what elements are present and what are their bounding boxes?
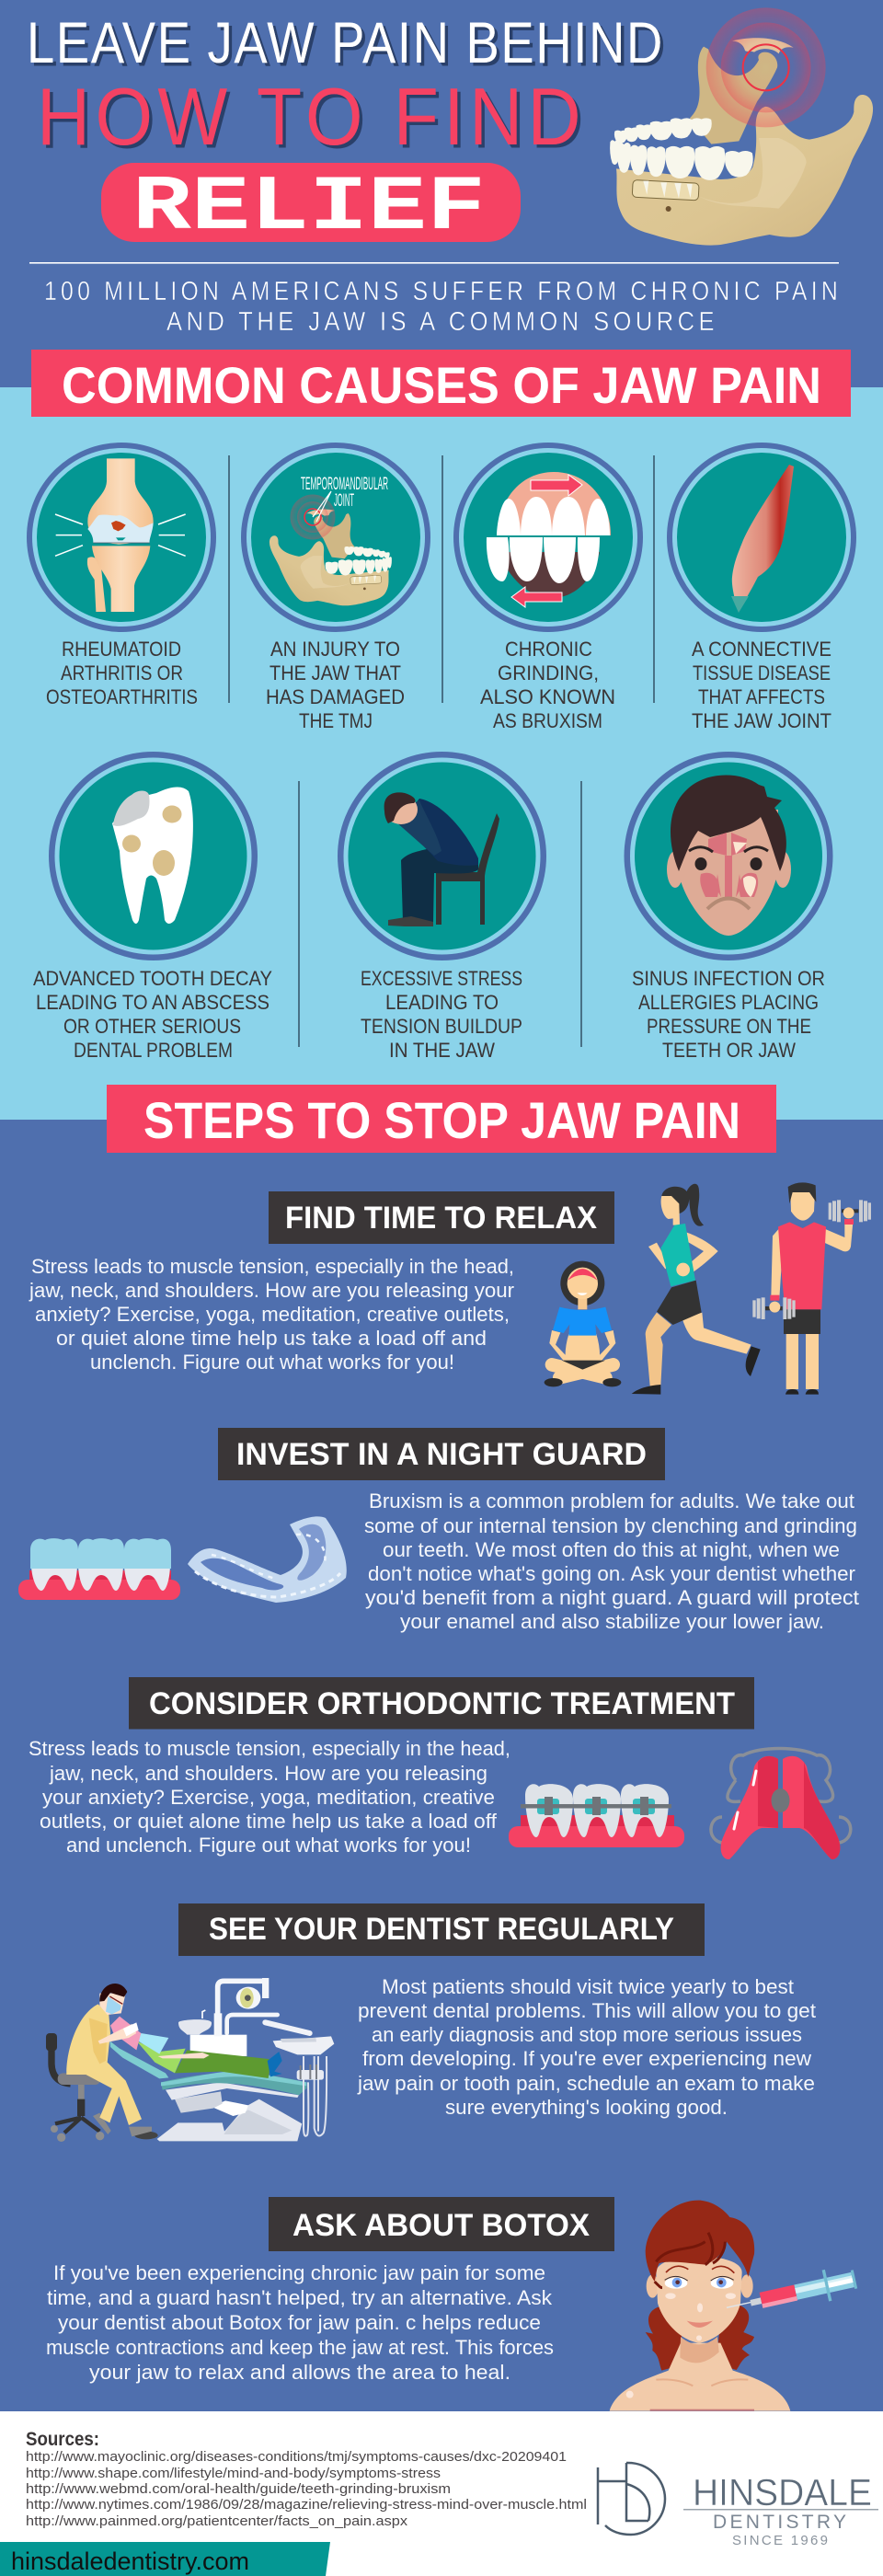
cause: jaw injury bbox=[241, 443, 430, 732]
caption: tooth decay: LEADING TO AN ABSCESS bbox=[36, 991, 269, 1014]
sources: http://www.webmd.com/oral-health/guide/teeth-grinding-bruxism bbox=[26, 2481, 451, 2497]
text block: orthodontic bbox=[29, 1737, 510, 1857]
text block: dentist: jaw pain or tooth pain, schedule an exam to make bbox=[357, 2072, 815, 2095]
text block: dentist: from developing. If you're ever experiencing new bbox=[362, 2047, 811, 2070]
illustration: braces bbox=[509, 1784, 684, 1847]
panel: orthodontic treatment bbox=[29, 1677, 851, 1859]
illustration: dentist and patient bbox=[46, 1978, 334, 2142]
caption: tooth decay bbox=[33, 967, 272, 1062]
text block: orthodontic: jaw, neck, and shoulders. How are you releasing bbox=[49, 1762, 487, 1785]
cause: tooth decay bbox=[33, 752, 272, 1062]
relief pill bbox=[101, 163, 521, 252]
icon: decayed tooth bbox=[49, 752, 258, 960]
caption: connective tissue: THE JAW JOINT bbox=[692, 709, 831, 732]
caption: grinding: GRINDING, bbox=[498, 661, 599, 684]
heading: botox: ASK ABOUT BOTOX bbox=[292, 2208, 590, 2243]
caption: sinus: ALLERGIES PLACING bbox=[638, 991, 819, 1014]
caption: stress bbox=[361, 967, 522, 1062]
sources: http://www.nytimes.com/1986/09/28/magazine/relieving-stress-mind-over-muscle.html bbox=[26, 2497, 587, 2513]
text block: night guard: our teeth. We most often do this at night, when we bbox=[383, 1538, 840, 1561]
text block: orthodontic: Stress leads to muscle tension, especially in the head, bbox=[29, 1737, 510, 1760]
heading: orthodontic: CONSIDER ORTHODONTIC TREATMENT bbox=[149, 1686, 735, 1721]
caption: stress: LEADING TO bbox=[385, 991, 499, 1014]
caption: connective tissue: A CONNECTIVE bbox=[692, 638, 831, 661]
sources: Sources: bbox=[26, 2429, 99, 2450]
caption: arthritis: OSTEOARTHRITIS bbox=[46, 685, 198, 708]
title line: how to find: HOW TO FIND bbox=[37, 71, 586, 162]
text block: dentist: sure everything's looking good. bbox=[445, 2096, 728, 2119]
caption: sinus bbox=[632, 967, 825, 1062]
logo wordmark: DENTISTRY bbox=[713, 2512, 846, 2533]
illustration: yoga, running, weights bbox=[545, 1182, 871, 1395]
text block: relax: unclench. Figure out what works for you! bbox=[90, 1351, 454, 1374]
footer url tab: hinsdaledentistry.com bbox=[11, 2547, 249, 2575]
text block: relax: Stress leads to muscle tension, especially in the head, bbox=[31, 1255, 514, 1278]
text block: botox: time, and a guard hasn't helped, try an alternative. Ask bbox=[47, 2286, 553, 2309]
lamp and tray bbox=[178, 1978, 334, 2136]
icon: tmj jaw bbox=[241, 443, 430, 632]
caption: jaw injury: THE JAW THAT bbox=[269, 661, 401, 684]
logo: hinsdale dentistry bbox=[598, 2463, 878, 2548]
caption: connective tissue: THAT AFFECTS bbox=[698, 685, 825, 708]
sources: http://www.mayoclinic.org/diseases-conditions/tmj/symptoms-causes/dxc-20209401 bbox=[26, 2449, 567, 2465]
heading: night guard bbox=[218, 1428, 665, 1480]
caption: grinding: CHRONIC bbox=[505, 638, 592, 661]
heading: orthodontic bbox=[129, 1677, 754, 1730]
panel: ask about botox bbox=[46, 2197, 859, 2411]
caption: arthritis: ARTHRITIS OR bbox=[61, 661, 183, 684]
icon: muscle bbox=[667, 443, 856, 632]
text block: relax: anxiety? Exercise, yoga, meditation, creative outlets, bbox=[35, 1303, 510, 1326]
dentist bbox=[46, 1984, 158, 2142]
logo mark: HD bbox=[598, 2463, 665, 2535]
logo wordmark: HINSDALE bbox=[693, 2471, 872, 2513]
text block: botox: muscle contractions and keep the jaw at rest. This forces bbox=[46, 2336, 554, 2359]
heading: botox bbox=[269, 2197, 614, 2251]
sources bbox=[26, 2429, 587, 2529]
caption: tooth decay: OR OTHER SERIOUS bbox=[63, 1015, 241, 1038]
text block: dentist bbox=[357, 1975, 816, 2119]
text block: night guard: don't notice what's going on. Ask your dentist whether bbox=[368, 1562, 855, 1585]
patient bbox=[110, 2017, 282, 2078]
caption: stress: IN THE JAW bbox=[389, 1039, 495, 1062]
icon: knee joint bbox=[27, 443, 216, 632]
figure: sitting woman bbox=[545, 1261, 621, 1386]
heading: see your dentist: SEE YOUR DENTIST REGULARLY bbox=[209, 1912, 674, 1947]
caption: jaw injury: THE TMJ bbox=[299, 709, 373, 732]
cause: grinding bbox=[453, 443, 643, 732]
title line: leave jaw pain behind: LEAVE JAW PAIN BEHIND bbox=[27, 11, 664, 75]
heading: find time to relax bbox=[269, 1191, 614, 1244]
text block: relax bbox=[29, 1255, 514, 1374]
caption: grinding: AS BRUXISM bbox=[493, 709, 602, 732]
cause: sinus bbox=[624, 752, 833, 1062]
logo wordmark: SINCE 1969 bbox=[732, 2533, 828, 2548]
text block: night guard: you'd benefit from a night guard. A guard will protect bbox=[365, 1586, 859, 1609]
caption: grinding bbox=[480, 638, 615, 732]
text block: night guard: Bruxism is a common problem for adults. We take out bbox=[369, 1489, 854, 1512]
icon: stressed man on chair bbox=[338, 752, 546, 960]
text block: orthodontic: your anxiety? Exercise, yoga, meditation, creative bbox=[42, 1786, 495, 1809]
figure: man with dumbbells bbox=[752, 1182, 871, 1395]
heading: find time to relax: FIND TIME TO RELAX bbox=[285, 1201, 597, 1236]
caption: stress: TENSION BUILDUP bbox=[361, 1015, 522, 1038]
text block: botox: your jaw to relax and allows the area to heal. bbox=[89, 2361, 510, 2384]
heading: common causes: COMMON CAUSES OF JAW PAIN bbox=[62, 356, 821, 414]
caption: sinus: TEETH OR JAW bbox=[662, 1039, 796, 1062]
caption: jaw injury bbox=[266, 638, 405, 732]
caption: tooth decay: ADVANCED TOOTH DECAY bbox=[33, 967, 272, 990]
illustration: clear night guard bbox=[188, 1516, 347, 1603]
subtitle text bbox=[29, 262, 842, 337]
caption: stress: EXCESSIVE STRESS bbox=[361, 967, 522, 990]
caption: tooth decay: DENTAL PROBLEM bbox=[74, 1039, 233, 1062]
icon: tmj jaw: JOINT bbox=[334, 491, 354, 511]
caption: connective tissue: TISSUE DISEASE bbox=[693, 661, 831, 684]
caption: arthritis: RHEUMATOID bbox=[62, 638, 181, 661]
text block: orthodontic: outlets, or quiet alone time help us take a load off bbox=[40, 1810, 498, 1833]
sources: http://www.shape.com/lifestyle/mind-and-body/symptoms-stress bbox=[26, 2466, 441, 2481]
caption: arthritis bbox=[46, 638, 198, 708]
cause: arthritis bbox=[27, 443, 216, 708]
panel: causes bbox=[27, 443, 856, 1062]
text block: dentist: prevent dental problems. This will allow you to get bbox=[358, 1999, 816, 2022]
heading: see your dentist bbox=[178, 1903, 705, 1956]
text block: botox: If you've been experiencing chronic jaw pain for some bbox=[53, 2261, 545, 2284]
caption: jaw injury: AN INJURY TO bbox=[270, 638, 400, 661]
text block: night guard: some of our internal tension by clenching and grinding bbox=[364, 1514, 857, 1537]
sources: http://www.painmed.org/patientcenter/facts_on_pain.aspx bbox=[26, 2513, 408, 2529]
panel: find time to relax bbox=[29, 1182, 871, 1395]
heading: steps to stop jaw pain: STEPS TO STOP JAW PAIN bbox=[143, 1091, 740, 1149]
caption: grinding: ALSO KNOWN bbox=[480, 685, 615, 708]
cause: connective tissue bbox=[667, 443, 856, 732]
heading: night guard: INVEST IN A NIGHT GUARD bbox=[236, 1437, 647, 1472]
relief pill: RELIEF bbox=[132, 165, 486, 252]
text block: botox: your dentist about Botox for jaw pain. c helps reduce bbox=[58, 2311, 541, 2334]
text block: dentist: Most patients should visit twice yearly to best bbox=[382, 1975, 794, 1998]
illustration: retainer bbox=[711, 1748, 851, 1859]
caption: connective tissue bbox=[692, 638, 831, 732]
icon: sinus face bbox=[624, 752, 833, 960]
text block: relax: jaw, neck, and shoulders. How are you releasing your bbox=[29, 1279, 514, 1302]
dental chair bbox=[109, 2041, 306, 2141]
caption: jaw injury: HAS DAMAGED bbox=[266, 685, 405, 708]
logo wordmark bbox=[683, 2471, 878, 2548]
caption: sinus: SINUS INFECTION OR bbox=[632, 967, 825, 990]
figure: runner bbox=[632, 1184, 761, 1395]
icon: grinding teeth bbox=[453, 443, 643, 632]
panel: see your dentist bbox=[46, 1903, 816, 2142]
text block: relax: or quiet alone time help us take a load off and bbox=[56, 1327, 487, 1350]
illustration: woman receiving injection bbox=[610, 2201, 859, 2411]
cause: stress bbox=[338, 752, 546, 1062]
subtitle text: AND THE JAW IS A COMMON SOURCE bbox=[166, 307, 718, 337]
header panel bbox=[27, 7, 873, 337]
illustration: teeth model bbox=[18, 1538, 180, 1600]
panel: invest in a night guard bbox=[18, 1428, 859, 1633]
text block: night guard: your enamel and also stabilize your lower jaw. bbox=[400, 1610, 824, 1633]
icon: tmj jaw: TEMPOROMANDIBULAR bbox=[301, 475, 388, 494]
syringe bbox=[723, 2263, 859, 2323]
illustration: jaw with pain rings bbox=[610, 7, 873, 246]
text block: orthodontic: and unclench. Figure out what works for you! bbox=[66, 1834, 471, 1857]
text block: night guard bbox=[364, 1489, 859, 1633]
caption: sinus: PRESSURE ON THE bbox=[647, 1015, 811, 1038]
footer url tab bbox=[0, 2542, 330, 2576]
text block: dentist: an early diagnosis and stop more serious issues bbox=[372, 2023, 802, 2046]
text block: botox bbox=[46, 2261, 554, 2384]
